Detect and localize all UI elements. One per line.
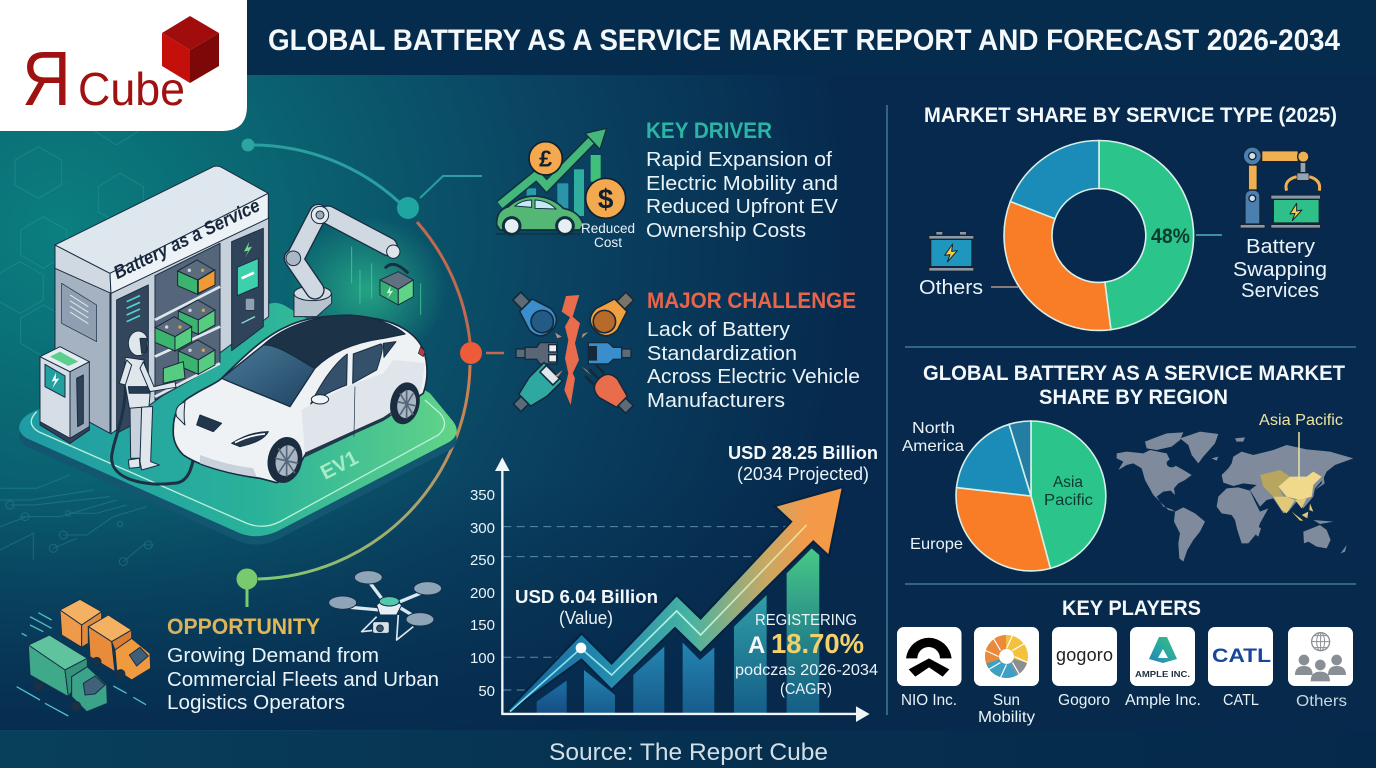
player names: CATL [1223, 692, 1259, 709]
player names: Mobility [978, 709, 1035, 726]
body text: Ownership Costs [646, 220, 806, 242]
world map [1117, 432, 1353, 562]
logo wordmark: Cube [78, 63, 185, 115]
platform [19, 303, 457, 545]
icon: car with rising cost arrow [496, 128, 626, 234]
y axis labels: 50 [478, 683, 495, 700]
body text: Manufacturers [647, 390, 785, 412]
card: Sun Mobility [974, 627, 1039, 686]
robotic arm [286, 206, 408, 317]
callout: base value: USD 6.04 Billion [515, 587, 658, 607]
callout: 2034 value: USD 28.25 Billion [728, 443, 878, 463]
icon: delivery drone [329, 571, 442, 640]
humanoid robot [119, 331, 176, 470]
pie labels [902, 420, 1093, 553]
heading: MARKET SHARE BY SERVICE TYPE (2025) [924, 104, 1337, 127]
body text: Standardization [647, 343, 797, 365]
body text: Rapid Expansion of [646, 149, 832, 171]
y axis labels: 300 [470, 520, 495, 537]
y axis labels: 200 [470, 585, 495, 602]
icon: car with rising cost arrow: £ [539, 146, 552, 172]
icon: delivery trucks [17, 599, 151, 716]
callout: CAGR [735, 612, 878, 698]
logo [0, 0, 247, 131]
card: Ample: AMPLE INC. [1135, 669, 1190, 679]
footer band [0, 731, 1376, 768]
light beams [352, 247, 421, 315]
card: CATL [1208, 627, 1273, 686]
player names: Gogoro [1058, 692, 1110, 709]
body text [167, 645, 439, 714]
body text: Reduced Upfront EV [646, 196, 839, 218]
battery shelf [155, 260, 215, 383]
logo wordmark [22, 36, 185, 122]
player names [901, 692, 1347, 726]
icon label: reduced cost: Reduced [581, 221, 635, 236]
heading: KEY DRIVER [646, 118, 772, 143]
illustration: battery swap station and EV [19, 166, 457, 545]
y axis labels: 100 [470, 650, 495, 667]
value label: 48% [1151, 225, 1190, 248]
body text: Across Electric Vehicle [647, 366, 860, 388]
card: Gogoro: gogoro [1056, 645, 1113, 665]
pie labels: America [902, 438, 964, 455]
EV bay marking: EV1 [317, 446, 362, 484]
icon: battery swapping robot [1240, 147, 1321, 228]
panel: market share by region [902, 362, 1353, 571]
callout: CAGR: podczas 2026-2034 [735, 662, 878, 679]
player names: Ample Inc. [1125, 692, 1201, 709]
station building [55, 166, 269, 434]
icon label: reduced cost: Cost [594, 235, 622, 250]
logo wordmark: Я [22, 36, 71, 122]
heading [923, 362, 1345, 409]
body text: Lack of Battery [647, 319, 790, 341]
charger kiosk [40, 347, 89, 443]
player names: Others [1296, 693, 1347, 710]
callout: base value: (Value) [559, 608, 613, 628]
panel: opportunity [17, 571, 442, 716]
sign text: Battery as a Service [110, 194, 263, 283]
label: battery swapping services [1233, 236, 1327, 302]
header band [0, 0, 1376, 75]
pie labels: Asia [1053, 474, 1083, 491]
body text: Electric Mobility and [646, 173, 838, 195]
body text: Logistics Operators [167, 692, 345, 714]
decorative hex and circuit pattern [0, 130, 153, 566]
map callout: Asia Pacific: Asia Pacific [1259, 412, 1343, 429]
hanging battery [380, 272, 413, 305]
player names: Sun [993, 692, 1020, 709]
icon: red cube [162, 16, 219, 83]
card: CATL: CATL [1212, 646, 1271, 667]
y axis labels: 150 [470, 617, 495, 634]
callout: CAGR: 18.70% [771, 628, 864, 659]
card: Gogoro [1052, 627, 1117, 686]
heading: OPPORTUNITY [167, 614, 320, 639]
card: NIO [897, 627, 962, 686]
callout: base value [515, 587, 658, 628]
charging cable [112, 370, 205, 484]
pie chart [956, 421, 1106, 571]
callout: CAGR: A [748, 632, 765, 659]
source line: Source: The Report Cube [549, 739, 828, 766]
label: battery swapping services: Battery [1246, 236, 1315, 258]
heading: SHARE BY REGION [1039, 386, 1228, 409]
icon: incompatible connectors [506, 285, 641, 419]
heading: MAJOR CHALLENGE [647, 288, 856, 313]
green glow [287, 217, 447, 363]
panel: market share by service type [919, 104, 1337, 330]
icon: car with rising cost arrow: $ [598, 183, 614, 214]
panel: major challenge [506, 285, 860, 419]
player names: NIO Inc. [901, 692, 957, 709]
label: others: Others [919, 277, 983, 299]
donut chart [1004, 140, 1194, 330]
card: Ample [1130, 627, 1195, 686]
pie labels: Europe [910, 536, 963, 553]
pie labels: Pacific [1044, 492, 1093, 509]
icon: battery [929, 231, 974, 271]
callout: 2034 value [728, 443, 878, 484]
pie labels: North [912, 420, 955, 437]
chart: market growth [470, 443, 878, 722]
body text [647, 319, 860, 412]
body text [646, 149, 839, 242]
card: Others [1288, 627, 1353, 686]
callout: CAGR: REGISTERING [755, 612, 857, 629]
chart graphics [495, 457, 870, 722]
icon label: reduced cost [581, 221, 635, 250]
body text: Growing Demand from [167, 645, 379, 667]
heading: GLOBAL BATTERY AS A SERVICE MARKET [923, 362, 1345, 385]
callout: CAGR: (CAGR) [780, 681, 832, 698]
y axis labels: 250 [470, 552, 495, 569]
body text: Commercial Fleets and Urban [167, 669, 439, 691]
callout: 2034 value: (2034 Projected) [737, 464, 869, 484]
timeline arc [236, 138, 504, 607]
label: battery swapping services: Services [1241, 280, 1319, 302]
map callout: Asia Pacific [1259, 412, 1343, 481]
panel: key driver [496, 118, 839, 250]
label: battery swapping services: Swapping [1233, 259, 1327, 281]
panel: key players [897, 597, 1353, 726]
y axis labels: 350 [470, 487, 495, 504]
heading: KEY PLAYERS [1062, 597, 1201, 620]
electric car [173, 315, 427, 486]
y axis labels [470, 487, 495, 700]
